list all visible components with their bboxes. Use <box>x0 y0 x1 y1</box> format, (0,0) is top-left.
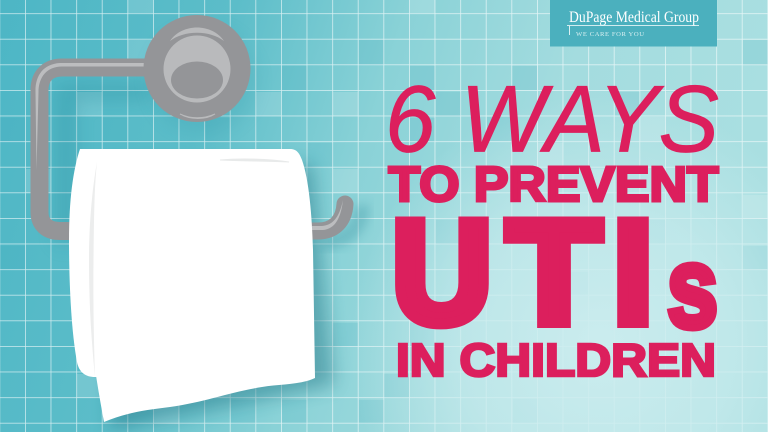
title word: UTIs: T <box>507 190 601 354</box>
arm highlight <box>35 63 166 170</box>
crease at roll top <box>220 159 289 162</box>
toilet paper holder <box>35 15 345 231</box>
logo: DuPage Medical Group <box>550 0 717 46</box>
top glint <box>170 28 224 41</box>
logo: DuPage Medical Group: DuPage Medical Group <box>569 9 699 26</box>
back sheet <box>69 149 130 377</box>
hook highlight <box>312 200 343 230</box>
wall mount plate <box>144 15 250 122</box>
toilet paper roll <box>69 149 315 422</box>
title line: 6 WAYS: 6 WAYS <box>385 66 719 172</box>
title word: UTIs: I <box>613 190 653 354</box>
title word: UTIs: s <box>667 224 718 352</box>
fold shading <box>89 162 97 377</box>
hanging front sheet <box>82 149 315 422</box>
title line: IN CHILDREN: IN CHILDREN <box>396 334 716 386</box>
mount knob <box>164 36 230 102</box>
logo: DuPage Medical Group: WE CARE FOR YOU <box>576 31 644 38</box>
title <box>385 66 719 386</box>
knob inner recess <box>171 62 223 98</box>
soft shadows cast on the wall <box>56 26 362 430</box>
right hook <box>300 204 345 231</box>
holder arm <box>40 68 170 231</box>
title word: UTIs: U <box>392 190 492 354</box>
title word: UTIs <box>392 190 718 354</box>
title line: TO PREVENT: TO PREVENT <box>388 158 719 212</box>
bottom glint <box>180 114 215 118</box>
